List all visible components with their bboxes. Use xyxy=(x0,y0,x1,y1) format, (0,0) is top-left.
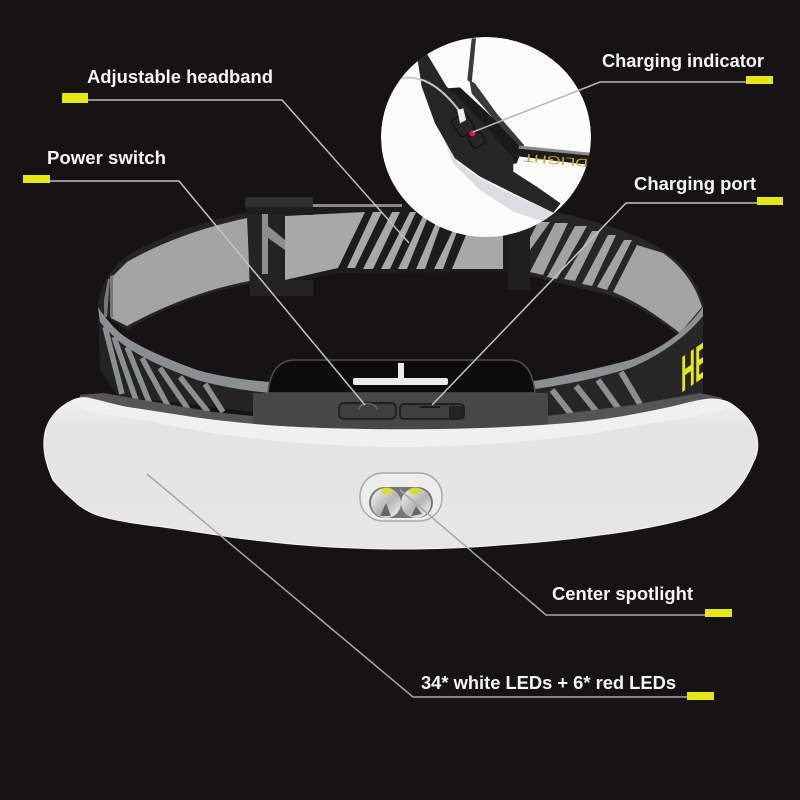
callout: center spotlight: Center spotlight xyxy=(552,584,693,604)
inset: cable xyxy=(400,78,460,112)
callout: charging port xyxy=(432,174,783,405)
callout: charging indicator xyxy=(473,51,773,132)
callout: charging indicator: Charging indicator xyxy=(602,51,764,71)
control buttons xyxy=(339,403,464,419)
lamp white body xyxy=(44,398,758,549)
headband: rear grey section beside right buckle xyxy=(452,230,503,269)
headband: rear centre dark backing xyxy=(285,204,530,283)
lamp body: top highlight xyxy=(73,403,733,447)
headband: rear left dark edge xyxy=(98,212,250,330)
buckle: left xyxy=(245,197,313,296)
headband: printed brand letters: HE xyxy=(681,329,708,405)
power button xyxy=(339,403,396,419)
headband: front right section xyxy=(534,307,703,416)
headband: rear right grey section xyxy=(613,245,702,333)
buckle: right xyxy=(508,225,530,290)
callout: adjustable headband xyxy=(62,67,409,243)
callout: power switch: Power switch xyxy=(47,148,166,168)
headband: rear centre grey section xyxy=(285,212,365,280)
spotlight LED chips xyxy=(381,488,393,494)
headband: rear left grey section xyxy=(111,218,250,326)
callout: adjustable headband: Adjustable headband xyxy=(87,67,273,87)
inset: connector xyxy=(457,108,466,123)
lamp housing xyxy=(78,393,722,425)
inset: lamp housing xyxy=(418,53,561,213)
inset: strap with lettering xyxy=(520,149,590,165)
rear plate with white slider xyxy=(268,360,535,393)
inset: lamp white edge xyxy=(444,138,553,222)
callout: LED count xyxy=(147,474,714,700)
callout: charging port: Charging port xyxy=(634,174,756,194)
inset: rear strap xyxy=(467,38,476,83)
center spotlight xyxy=(360,473,442,521)
headband: rear right dark edge xyxy=(530,212,704,337)
spotlight reflector xyxy=(369,487,433,518)
control panel xyxy=(253,393,548,435)
spotlight bezel xyxy=(360,473,442,521)
callout: center spotlight xyxy=(400,490,732,617)
headband: rear right stripes xyxy=(530,222,632,290)
inset photo: charging indicator: DLIGHT xyxy=(523,151,589,168)
callout: LED count: 34* white LEDs + 6* red LEDs xyxy=(421,673,676,693)
headband: front left section xyxy=(98,307,288,416)
headband xyxy=(98,197,708,418)
inset: port and button outlines xyxy=(451,112,476,138)
charging port cover xyxy=(400,404,464,419)
inset photo: charging indicator xyxy=(381,37,591,237)
callout: power switch xyxy=(23,148,365,405)
inset: rear plate xyxy=(447,87,524,167)
headband: rear centre stripes xyxy=(347,212,460,269)
inset: red LED xyxy=(469,130,475,136)
